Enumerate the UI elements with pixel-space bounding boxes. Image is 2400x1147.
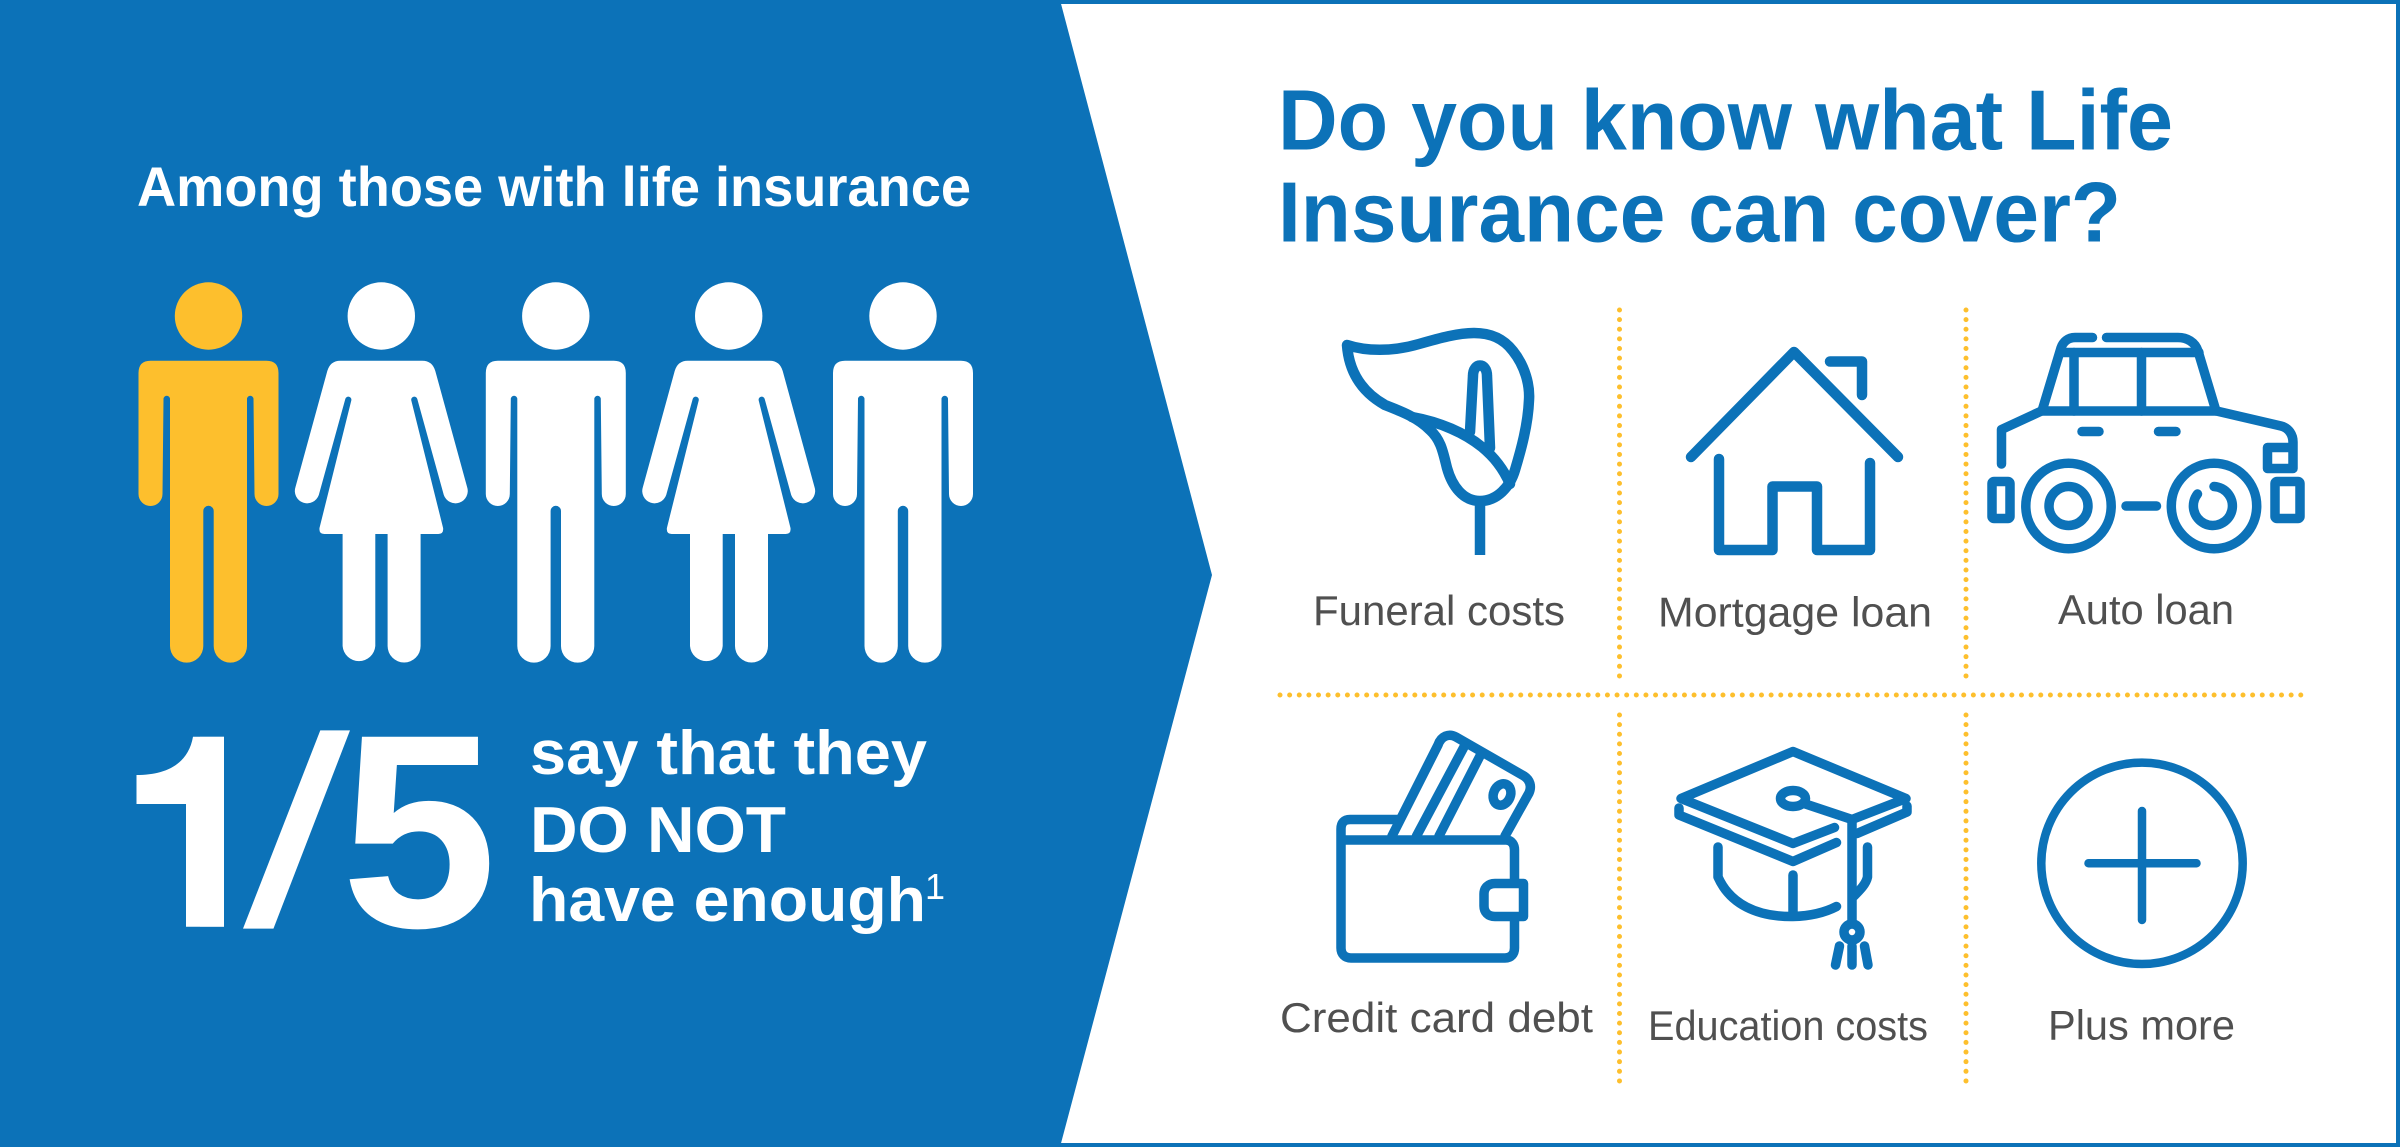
footnote marker: 1 [925, 866, 945, 907]
icon: funeral lily [1347, 333, 1529, 555]
label: education costs: Education costs [1648, 1002, 1928, 1049]
text: have enough with footnote: have enough [529, 866, 926, 935]
label: credit card debt: Credit card debt [1280, 994, 1593, 1041]
heading: do you know what life insurance can cover: Insurance can cover? [1278, 166, 2121, 260]
big statistic: 1/5: / [243, 683, 351, 984]
icon: wallet and credit card [1341, 735, 1530, 958]
label: funeral costs: Funeral costs [1313, 587, 1565, 634]
icon: graduation cap [1679, 752, 1907, 965]
big statistic: 1/5: 1 [124, 678, 277, 986]
label: plus more: Plus more [2048, 1002, 2235, 1048]
label: auto loan: Auto loan [2058, 586, 2234, 633]
heading: do you know what life insurance can cover: Do you know what Life [1278, 74, 2173, 168]
person: white man 2 [833, 282, 973, 663]
icon: house [1691, 352, 1898, 550]
person: white man 1 [486, 282, 626, 663]
big statistic: 1/5: 5 [341, 678, 497, 986]
label: mortgage loan: Mortgage loan [1658, 588, 1932, 636]
person: yellow man [138, 282, 278, 663]
person: white woman 1 [295, 282, 468, 662]
text: say that they: say that they [530, 719, 928, 788]
icon: plus circle [2041, 763, 2243, 964]
big statistic: 1/5 [136, 730, 490, 930]
icon: car [1992, 338, 2300, 549]
panel: white background with blue frame [1050, 2, 2398, 1145]
heading: among those with life insurance: Among those with life insurance [137, 155, 971, 218]
heading: do you know what life insurance can cover [1278, 74, 2173, 260]
text: do not: DO NOT [530, 793, 786, 866]
person: white woman 2 [642, 282, 815, 662]
panel: blue arrow [0, 0, 1212, 1147]
